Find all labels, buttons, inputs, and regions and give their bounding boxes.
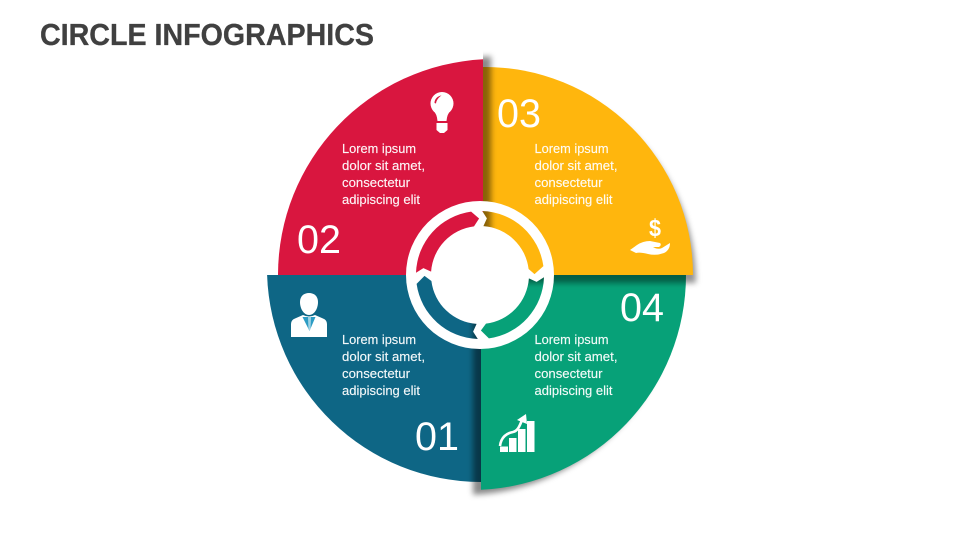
text block 02: Lorem ipsum [342, 142, 416, 156]
text block 02: consectetur [342, 176, 410, 190]
text block 01: consectetur [342, 367, 410, 381]
text block 04: Lorem ipsum [534, 333, 608, 347]
icon: dollar in hand [630, 215, 670, 255]
text block 04: adipiscing elit [534, 384, 613, 398]
number 04: 04 [620, 286, 664, 330]
number 01: 01 [415, 415, 459, 459]
panel: 02 red quadrant [278, 59, 483, 275]
text block 04: consectetur [534, 367, 602, 381]
icon: dollar in hand: $ [649, 215, 662, 242]
text block 02: adipiscing elit [342, 193, 421, 207]
number 02: 02 [297, 218, 341, 262]
panel: 01 blue quadrant [267, 275, 481, 482]
number 03: 03 [497, 92, 541, 136]
text block 01: dolor sit amet, [342, 350, 425, 364]
panel: 03 yellow quadrant [483, 67, 693, 275]
icon: light bulb [430, 92, 454, 133]
icon: businessman [291, 293, 327, 337]
text block 04: dolor sit amet, [534, 350, 618, 364]
text block 01: Lorem ipsum [342, 333, 416, 347]
text block 03: adipiscing elit [534, 193, 613, 207]
title: CIRCLE INFOGRAPHICS [40, 17, 374, 52]
text block 02: dolor sit amet, [342, 159, 425, 173]
text block 03: dolor sit amet, [534, 159, 618, 173]
text block 04 [534, 333, 618, 398]
text block 03: consectetur [534, 176, 602, 190]
text block 01 [342, 333, 425, 398]
text block 03 [534, 142, 618, 207]
text block 02 [342, 142, 425, 207]
text block 03: Lorem ipsum [534, 142, 608, 156]
text block 01: adipiscing elit [342, 384, 421, 398]
center ring with four arrows [406, 201, 554, 349]
icon: growth chart [500, 414, 534, 452]
panel: 04 green quadrant [481, 275, 686, 490]
